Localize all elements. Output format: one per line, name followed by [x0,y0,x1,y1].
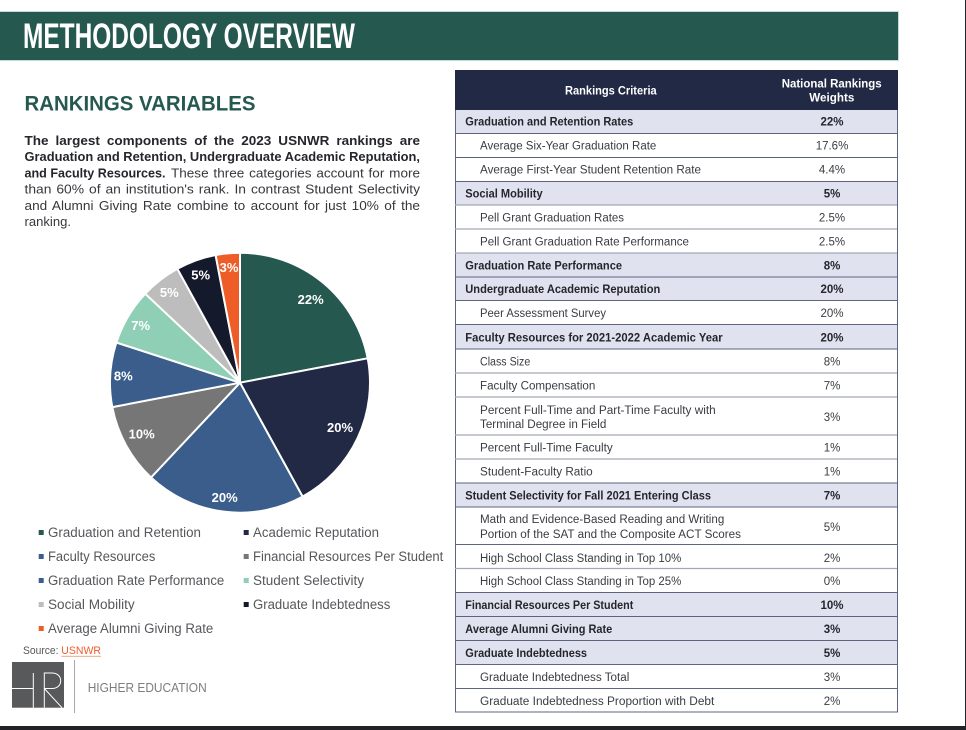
text block: summary paragraph: and Alumni Giving Rate combine to account for just 10% of the [24,199,420,213]
table: rankings criteria and weights [455,70,898,712]
pie chart: rankings weights: 5% [160,285,179,300]
row: undergraduate academic reputation: Undergraduate Academic Reputation [465,284,660,296]
row: pell grant graduation rate performance: Pell Grant Graduation Rate Performance [480,237,689,249]
row: faculty resources: Faculty Resources for 2021-2022 Academic Year [465,333,723,345]
row: first-year retention [480,165,845,177]
row: pell grant graduation rate performance: 2.5% [819,237,845,249]
row: faculty resources: 20% [820,333,844,345]
text block: summary paragraph: Graduation and Retention, Undergraduate Academic Reputation, [24,150,420,164]
pie chart: rankings weights: 20% [327,420,353,435]
row: top 25 percent [480,576,840,588]
row: pell grant graduation rate performance [480,237,845,249]
row: class size: 8% [824,357,840,369]
table header: Weights [809,93,854,105]
row: social mobility: 5% [824,189,840,201]
row: SAT and ACT scores: Math and Evidence-Based Reading and Writing [480,514,724,526]
chart legend: Graduation Rate Performance [48,573,224,588]
row: top 25 percent: 0% [824,576,840,588]
row: class size: Class Size [480,357,530,369]
row: social mobility: Social Mobility [465,189,543,201]
row: class size [480,357,840,369]
row: social mobility [465,189,840,201]
text block: summary paragraph: ranking. [24,215,71,229]
row: graduation and retention rates [465,117,844,129]
row: pell grant graduation rates: Pell Grant Graduation Rates [480,213,624,225]
chart legend: Social Mobility [48,597,135,612]
text block: summary paragraph: The largest components of the 2023 USNWR rankings are [24,134,420,148]
row: pell grant graduation rates: 2.5% [819,213,845,225]
row: average alumni giving rate [465,624,840,636]
row: undergraduate academic reputation [465,284,844,296]
chart legend [39,525,444,636]
row: financial resources per student: 10% [820,600,844,612]
row: graduate indebtedness total [480,672,840,684]
text block: summary paragraph: and Faculty Resources. [24,166,166,180]
row: proportion with debt: Graduate Indebtedness Proportion with Debt [480,696,715,708]
row: top 10 percent: 2% [824,553,840,565]
title banner [0,11,899,61]
row: financial resources per student [465,600,844,612]
row: terminal degree faculty [480,405,840,431]
row: student selectivity: 7% [824,491,840,503]
row: faculty compensation: 7% [824,381,840,393]
row: average alumni giving rate: 3% [824,624,840,636]
row: graduate indebtedness: 5% [824,648,840,660]
row: average six-year graduation rate: Average Six-Year Graduation Rate [480,141,656,153]
row: faculty compensation: Faculty Compensation [480,381,595,393]
row: top 10 percent: High School Class Standing in Top 10% [480,553,681,565]
pie chart: rankings weights: 5% [191,268,211,282]
chart legend: Faculty Resources [48,549,156,564]
row: graduate indebtedness: Graduate Indebtedness [465,648,587,660]
row: average alumni giving rate: Average Alumni Giving Rate [465,624,612,636]
row: proportion with debt: 2% [824,696,840,708]
chart legend: Graduation and Retention [48,525,201,540]
table header: National Rankings [782,79,882,91]
row lines [455,110,898,712]
logo: HR higher education [12,660,207,713]
source note: USNWR [61,645,101,657]
row: faculty compensation [480,381,840,393]
row: financial resources per student: Financial Resources Per Student [465,600,633,612]
pie chart: rankings weights: 7% [131,318,151,333]
row: student selectivity: Student Selectivity for Fall 2021 Entering Class [465,491,711,503]
chart legend: Graduate Indebtedness [253,597,391,612]
pie chart: rankings weights: 8% [114,368,133,384]
row: terminal degree faculty: 3% [824,412,840,424]
row: SAT and ACT scores [480,514,840,541]
row: peer assessment survey: Peer Assessment Survey [480,308,606,320]
row: graduate indebtedness total: Graduate Indebtedness Total [480,672,629,684]
pie chart: rankings weights: 22% [298,292,324,307]
row: proportion with debt [480,696,840,708]
row: SAT and ACT scores: 5% [824,522,840,534]
chart legend: Student Selectivity [253,573,364,588]
row: graduate indebtedness total: 3% [824,672,840,684]
row: student-faculty ratio [480,467,840,479]
row: top 25 percent: High School Class Standing in Top 25% [480,576,681,588]
chart legend: Academic Reputation [253,525,379,540]
logo: HR higher education: HIGHER EDUCATION [88,681,207,695]
row: SAT and ACT scores: Portion of the SAT and the Composite ACT Scores [480,529,741,541]
row: average six-year graduation rate [480,141,848,153]
text block: summary paragraph: than 60% of an institution's rank. In contrast Student Selectivity [24,182,421,196]
row: undergraduate academic reputation: 20% [820,284,844,296]
row: student-faculty ratio: 1% [824,467,840,479]
chart legend: Average Alumni Giving Rate [48,621,213,636]
row: pell grant graduation rates [480,213,845,225]
title banner: METHODOLOGY OVERVIEW [23,17,355,56]
row: graduation and retention rates: Graduation and Retention Rates [465,117,633,129]
source note: Source: [23,645,58,657]
row: graduation rate performance: 8% [824,261,840,273]
row: graduation and retention rates: 22% [820,117,844,129]
chart legend: Financial Resources Per Student [253,549,444,564]
row: peer assessment survey [480,308,844,320]
heading: rankings variables: RANKINGS VARIABLES [24,92,256,116]
pie chart: rankings weights: 3% [220,260,239,275]
row: percent full-time faculty [480,443,840,455]
row: faculty resources [465,333,844,345]
row: terminal degree faculty: Terminal Degree in Field [480,419,606,431]
text block: summary paragraph [24,134,421,229]
pie chart: rankings weights: 10% [129,426,155,442]
shaded category rows [455,110,898,664]
row: peer assessment survey: 20% [820,308,844,320]
row: terminal degree faculty: Percent Full-Time and Part-Time Faculty with [480,405,716,417]
row: graduate indebtedness [465,648,840,660]
row: average six-year graduation rate: 17.6% [816,141,848,153]
table header: Rankings Criteria [565,85,657,97]
text block: summary paragraph: These three categories account for more [171,166,420,180]
row: percent full-time faculty: Percent Full-Time Faculty [480,443,613,455]
row: top 10 percent [480,553,840,565]
row: student-faculty ratio: Student-Faculty Ratio [480,467,593,479]
row: first-year retention: 4.4% [819,165,845,177]
pie chart: rankings weights: 20% [212,490,238,505]
row: graduation rate performance [465,261,840,273]
pie chart: rankings weights [110,253,370,513]
source note [23,645,101,657]
row: graduation rate performance: Graduation Rate Performance [465,261,622,273]
row: student selectivity [465,491,840,503]
row: percent full-time faculty: 1% [824,443,840,455]
table header [455,70,898,110]
row: first-year retention: Average First-Year Student Retention Rate [480,165,701,177]
